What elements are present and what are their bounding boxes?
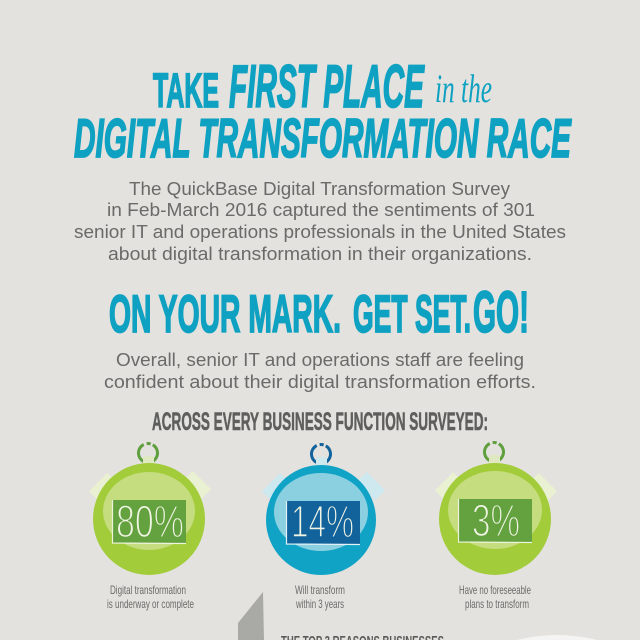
heading: on your mark: GET SET. xyxy=(353,285,471,344)
watch body xyxy=(93,463,205,575)
crown loop xyxy=(135,440,161,466)
stopwatch: 14 percent xyxy=(262,441,385,575)
crown stem xyxy=(316,457,327,466)
readout: 3% xyxy=(472,495,520,546)
crown stem xyxy=(489,455,500,465)
crown stem xyxy=(143,456,154,466)
watch body xyxy=(439,463,551,575)
watch face xyxy=(274,473,368,551)
caption: 3 percent: Have no foreseeable xyxy=(459,583,531,597)
confidence text xyxy=(104,349,536,392)
display xyxy=(459,499,532,542)
title: TAKE xyxy=(153,65,219,118)
grey road shape xyxy=(238,592,264,640)
caption: 80 percent xyxy=(107,583,194,611)
side buttons xyxy=(435,472,557,501)
watch face xyxy=(448,471,542,549)
display xyxy=(113,500,186,543)
caption: 3 percent: plans to transform xyxy=(465,597,529,611)
readout: 80% xyxy=(116,496,184,547)
side buttons xyxy=(262,472,385,501)
survey intro text: The QuickBase Digital Transformation Survey xyxy=(129,178,511,199)
survey intro text xyxy=(74,178,566,264)
stopwatch: 80 percent xyxy=(89,440,211,575)
crown loop xyxy=(481,439,507,465)
white circle xyxy=(517,635,597,640)
crown loop xyxy=(308,441,334,467)
caption: 14 percent: within 3 years xyxy=(295,597,344,611)
survey intro text: about digital transformation in their organizations. xyxy=(108,243,532,264)
display xyxy=(287,501,360,544)
watch face xyxy=(103,472,195,550)
stopwatch: 3 percent xyxy=(435,439,557,575)
display edge xyxy=(286,501,360,544)
title: FIRST PLACE xyxy=(229,53,425,120)
watch body xyxy=(266,465,376,575)
caption: 14 percent: Will transform xyxy=(295,583,345,597)
readout: 14% xyxy=(291,496,354,547)
side buttons xyxy=(89,471,211,501)
heading: on your mark: ON YOUR MARK. xyxy=(109,285,341,344)
title xyxy=(74,53,572,169)
display edge xyxy=(112,500,186,544)
display edge xyxy=(458,499,532,542)
caption: 3 percent xyxy=(459,583,531,611)
confidence text: confident about their digital transformation efforts. xyxy=(104,371,536,392)
survey intro text: in Feb-March 2016 captured the sentiments of 301 xyxy=(107,199,535,220)
caption: 80 percent: is underway or complete xyxy=(107,597,194,611)
confidence text: Overall, senior IT and operations staff are feeling xyxy=(116,349,524,370)
title: in the xyxy=(435,66,492,111)
caption: 14 percent xyxy=(295,583,345,611)
caption: 80 percent: Digital transformation xyxy=(110,583,186,597)
survey intro text: senior IT and operations professionals in the United States xyxy=(74,221,566,242)
heading: on your mark: GO! xyxy=(473,280,529,345)
